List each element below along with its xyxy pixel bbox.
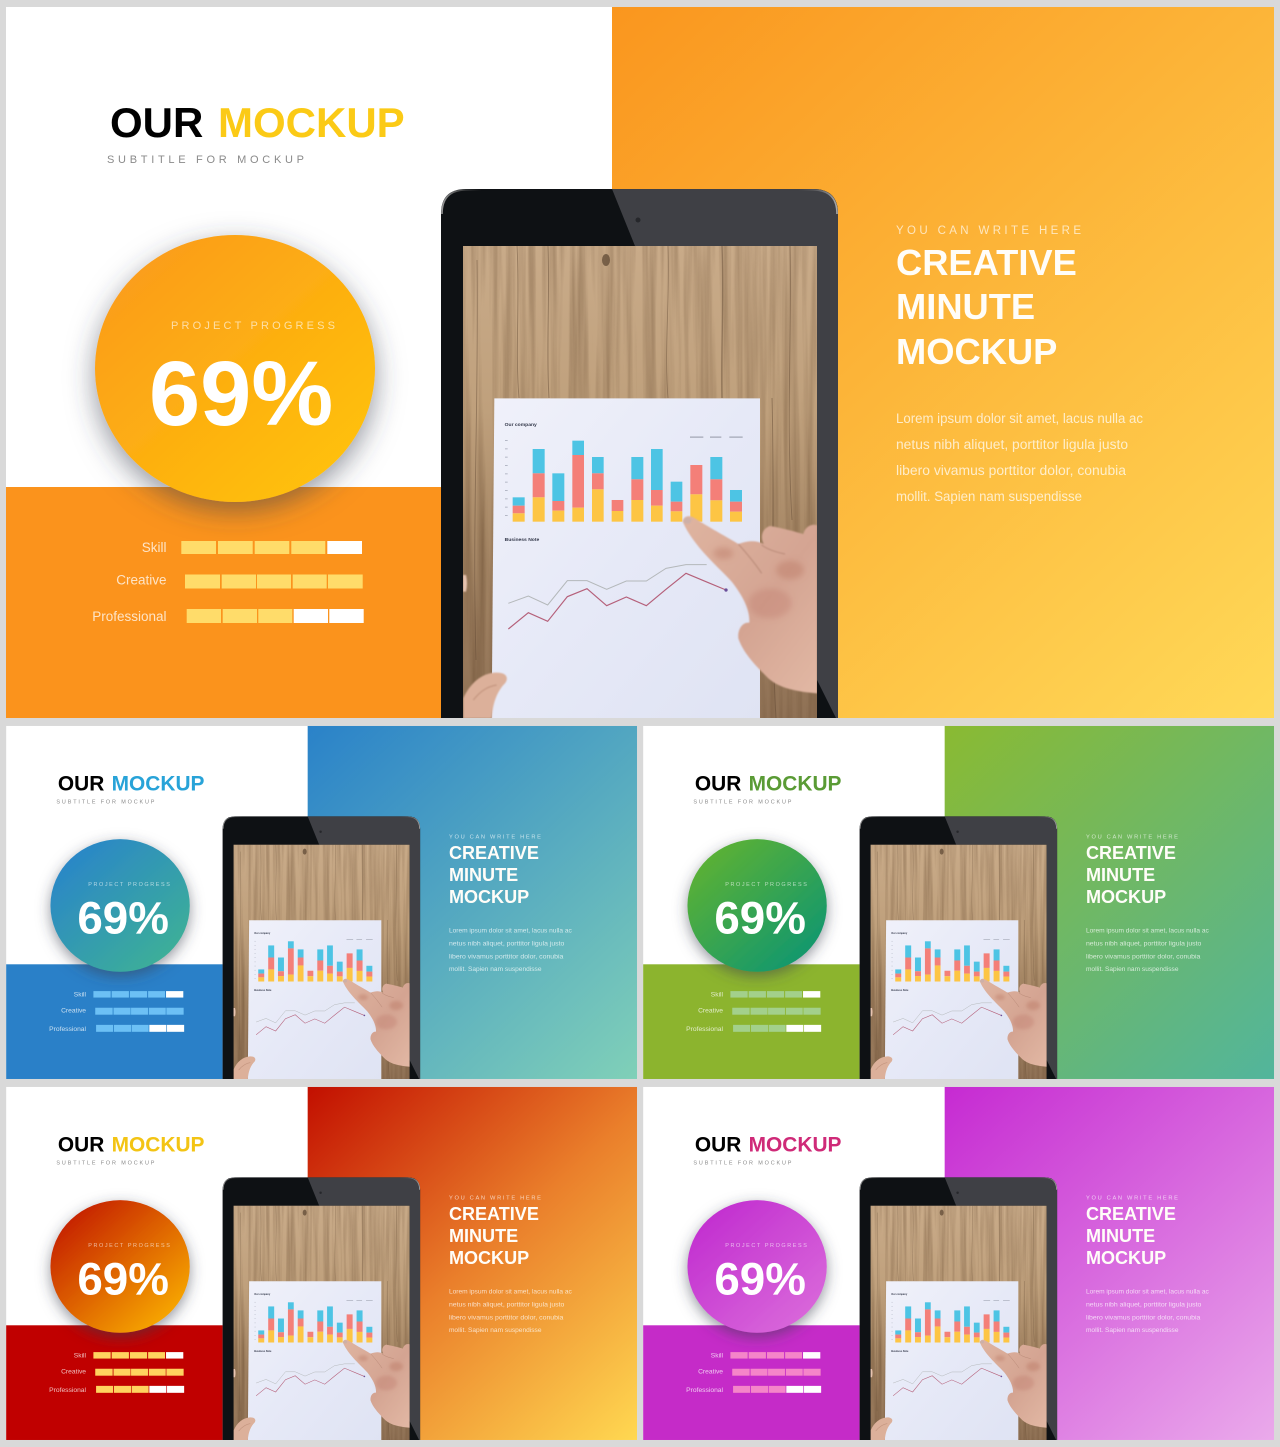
right text block: YOU CAN WRITE HERE	[449, 1196, 541, 1202]
title: OUR	[58, 1134, 104, 1157]
progress circle: 69%	[714, 893, 806, 944]
right text block: mollit. Sapien nam suspendisse	[449, 966, 542, 973]
title: OUR	[695, 773, 741, 796]
right text block: YOU CAN WRITE HERE	[1086, 1196, 1178, 1202]
skill bars: Professional	[686, 1026, 724, 1033]
title: OUR	[695, 1134, 741, 1157]
progress circle	[50, 839, 190, 972]
progress circle: PROJECT PROGRESS	[725, 1243, 807, 1249]
skill bars: Skill	[711, 992, 724, 999]
right text block: mollit. Sapien nam suspendisse	[449, 1327, 542, 1334]
right text block: MINUTE	[1086, 1226, 1155, 1246]
tablet mockup with chart photo	[860, 816, 1057, 1079]
right text block: libero vivamus porttitor dolor, conubia	[449, 953, 564, 960]
progress circle: PROJECT PROGRESS	[88, 1243, 170, 1249]
skill bars: Skill	[142, 540, 166, 555]
slide: blue variant	[6, 726, 637, 1079]
right text block: Lorem ipsum dolor sit amet, lacus nulla ac	[896, 411, 1143, 426]
panel: right gradient	[945, 726, 1274, 1079]
right text block: libero vivamus porttitor dolor, conubia	[1086, 953, 1201, 960]
progress circle	[687, 1200, 827, 1333]
tablet mockup with chart photo	[441, 189, 838, 718]
panel: lower left band	[6, 964, 223, 1079]
right text block: YOU CAN WRITE HERE	[1086, 835, 1178, 841]
right text block: netus nibh aliquet, porttitor ligula justo	[896, 437, 1128, 452]
skill bars: Creative	[61, 1008, 86, 1015]
skill bars	[686, 1352, 821, 1394]
right text block	[1086, 1196, 1209, 1334]
skill bars: Professional	[686, 1387, 724, 1394]
progress circle	[50, 1200, 190, 1333]
progress circle: PROJECT PROGRESS	[725, 882, 807, 888]
right text block: CREATIVE	[449, 1204, 539, 1224]
right text block: libero vivamus porttitor dolor, conubia	[896, 463, 1126, 478]
slide: main orange	[6, 7, 1274, 718]
skill bars: Skill	[74, 1353, 87, 1360]
right text block: YOU CAN WRITE HERE	[896, 225, 1081, 237]
right text block: MOCKUP	[449, 887, 529, 907]
skill bars	[49, 1352, 184, 1394]
right text block: netus nibh aliquet, porttitor ligula justo	[449, 1301, 565, 1308]
right text block: CREATIVE	[896, 242, 1077, 283]
right text block: MOCKUP	[1086, 887, 1166, 907]
slide: magenta variant	[643, 1087, 1274, 1440]
skill bars: Creative	[116, 572, 166, 588]
right text block: CREATIVE	[1086, 1204, 1176, 1224]
right text block: netus nibh aliquet, porttitor ligula justo	[1086, 940, 1202, 947]
skill bars: Skill	[711, 1353, 724, 1360]
skill bars: Professional	[49, 1026, 87, 1033]
right text block: MINUTE	[449, 865, 518, 885]
right text block: libero vivamus porttitor dolor, conubia	[449, 1314, 564, 1321]
right text block: MINUTE	[449, 1226, 518, 1246]
progress circle: PROJECT PROGRESS	[88, 882, 170, 888]
skill bars: Skill	[74, 992, 87, 999]
right text block: MOCKUP	[1086, 1248, 1166, 1268]
panel: lower left band	[643, 964, 860, 1079]
right text block: MINUTE	[896, 286, 1035, 327]
progress circle	[687, 839, 827, 972]
skill bars: Creative	[698, 1008, 723, 1015]
right text block: Lorem ipsum dolor sit amet, lacus nulla ac	[1086, 1289, 1209, 1296]
right text block: netus nibh aliquet, porttitor ligula justo	[449, 940, 565, 947]
title: MOCKUP	[749, 1134, 842, 1157]
title: MOCKUP	[112, 1134, 205, 1157]
skill bars	[686, 991, 821, 1033]
progress circle: 69%	[714, 1254, 806, 1305]
slide: green variant	[643, 726, 1274, 1079]
right text block: mollit. Sapien nam suspendisse	[1086, 966, 1179, 973]
skill bars: Professional	[49, 1387, 87, 1394]
right text block: MINUTE	[1086, 865, 1155, 885]
subtitle: SUBTITLE FOR MOCKUP	[56, 1160, 155, 1166]
subtitle: SUBTITLE FOR MOCKUP	[693, 799, 792, 805]
progress circle: 69%	[149, 343, 333, 445]
right text block: Lorem ipsum dolor sit amet, lacus nulla ac	[449, 928, 572, 935]
subtitle: SUBTITLE FOR MOCKUP	[56, 799, 155, 805]
title: MOCKUP	[112, 773, 205, 796]
skill bars: Professional	[92, 609, 166, 624]
skill bars: Creative	[61, 1369, 86, 1376]
right text block	[449, 835, 572, 973]
skill bars	[49, 991, 184, 1033]
skill bars: Creative	[698, 1369, 723, 1376]
panel: right gradient	[308, 1087, 637, 1440]
right text block: Lorem ipsum dolor sit amet, lacus nulla ac	[1086, 928, 1209, 935]
right text block: MOCKUP	[449, 1248, 529, 1268]
panel: right gradient	[612, 7, 1274, 718]
right text block: CREATIVE	[449, 843, 539, 863]
right text block: Lorem ipsum dolor sit amet, lacus nulla ac	[449, 1289, 572, 1296]
right text block: YOU CAN WRITE HERE	[449, 835, 541, 841]
title: OUR	[110, 99, 203, 146]
panel: lower left band	[6, 1325, 223, 1440]
right text block: mollit. Sapien nam suspendisse	[1086, 1327, 1179, 1334]
title: MOCKUP	[749, 773, 842, 796]
subtitle: SUBTITLE FOR MOCKUP	[693, 1160, 792, 1166]
tablet mockup with chart photo	[223, 816, 420, 1079]
subtitle: SUBTITLE FOR MOCKUP	[107, 154, 304, 166]
title: OUR	[58, 773, 104, 796]
title: MOCKUP	[218, 99, 405, 146]
skill bars	[92, 540, 364, 624]
right text block	[449, 1196, 572, 1334]
progress circle	[95, 235, 375, 502]
panel: right gradient	[308, 726, 637, 1079]
progress circle: PROJECT PROGRESS	[171, 320, 335, 332]
right text block: CREATIVE	[1086, 843, 1176, 863]
slide: red variant	[6, 1087, 637, 1440]
panel: right gradient	[945, 1087, 1274, 1440]
tablet mockup with chart photo	[860, 1177, 1057, 1440]
progress circle: 69%	[77, 893, 169, 944]
panel: lower left band	[6, 487, 441, 718]
right text block: libero vivamus porttitor dolor, conubia	[1086, 1314, 1201, 1321]
progress circle: 69%	[77, 1254, 169, 1305]
right text block: MOCKUP	[896, 331, 1057, 372]
right text block	[896, 225, 1143, 504]
right text block	[1086, 835, 1209, 973]
right text block: netus nibh aliquet, porttitor ligula justo	[1086, 1301, 1202, 1308]
right text block: mollit. Sapien nam suspendisse	[896, 489, 1082, 504]
tablet mockup with chart photo	[223, 1177, 420, 1440]
panel: lower left band	[643, 1325, 860, 1440]
